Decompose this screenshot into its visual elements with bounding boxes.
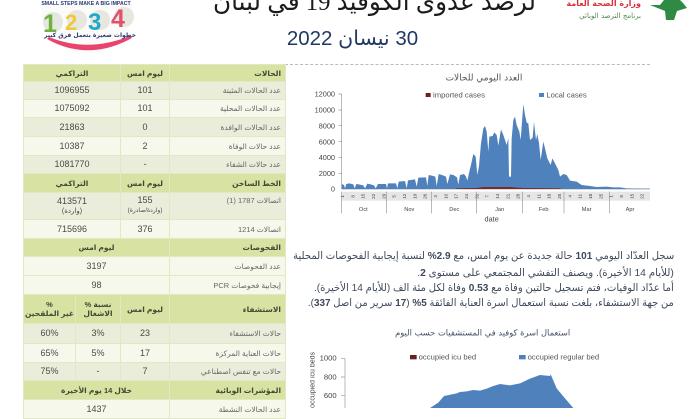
- axes: [338, 94, 650, 189]
- day tick labels: 17: [454, 193, 459, 199]
- icu row: حالات العناية المركزة: [215, 348, 281, 358]
- summary paragraph: [293, 250, 674, 309]
- indicators header row: [24, 381, 285, 399]
- legend: [410, 352, 599, 361]
- month labels: Jan: [495, 207, 504, 213]
- daily cases chart: [315, 74, 650, 224]
- hotline 1214 row: 376: [138, 224, 153, 234]
- imported cases row: عدد الحالات الوافدة: [220, 122, 281, 132]
- day tick labels: 26: [423, 193, 428, 199]
- recoveries row: عدد حالات الشفاء: [226, 160, 281, 169]
- icu row: 5%: [92, 348, 105, 358]
- logo: small steps campaign: 1: [43, 10, 57, 38]
- deaths row: [24, 137, 285, 155]
- logo: ministry of public health: برنامج الترصد الوبائي: [579, 12, 641, 20]
- month labels: Nov: [404, 207, 415, 213]
- icu row: 17: [140, 348, 150, 358]
- hospitalised row: 23: [140, 328, 150, 338]
- y axis labels: 6000: [319, 137, 335, 146]
- ventilator row: 75%: [40, 366, 58, 376]
- day tick labels: 3: [433, 195, 438, 198]
- hotline 1787 row: 155: [138, 195, 153, 205]
- confirmed cases row: 101: [138, 85, 153, 95]
- icu row: 65%: [40, 348, 58, 358]
- statistics table: [23, 64, 286, 419]
- day tick labels: 8: [350, 195, 355, 198]
- recoveries row: -: [144, 159, 147, 169]
- local cases row: 1075092: [54, 103, 90, 113]
- imported cases row: 21863: [59, 122, 85, 132]
- date: 30 نيسان 2022: [287, 27, 418, 50]
- hospitalised row: حالات الاستشفاء: [229, 329, 281, 338]
- chart title: العدد اليومي للحالات: [446, 74, 522, 84]
- confirmed cases row: [24, 82, 285, 99]
- day tick labels: 29: [381, 193, 386, 199]
- local cases row: عدد الحالات المحلية: [220, 104, 281, 113]
- month labels: Dec: [449, 207, 460, 213]
- test count row: [24, 257, 285, 275]
- deaths row: عدد حالات الوفاة: [229, 142, 281, 150]
- logo: small steps campaign: 2: [65, 10, 77, 35]
- month labels: Oct: [359, 207, 368, 213]
- confirmed cases row: 1096955: [54, 85, 90, 95]
- confirmed cases row: عدد الحالات المثبتة: [223, 86, 281, 95]
- y axis labels: [320, 354, 337, 400]
- y axis labels: 800: [324, 372, 337, 381]
- day tick labels: 5: [392, 195, 397, 198]
- hospital beds chart: [310, 327, 599, 408]
- day tick labels: 19: [412, 193, 417, 199]
- day tick labels: 11: [536, 194, 541, 199]
- hotline header row: الخط الساخن: [232, 178, 281, 188]
- logo: ministry of public health: [566, 0, 687, 20]
- day tick labels: 8: [619, 195, 624, 198]
- active cases row: عدد الحالات النشطة: [219, 404, 281, 414]
- logo: small steps campaign: SMALL STEPS MAKE A BIG IMPACT: [41, 1, 131, 7]
- month labels: Feb: [539, 207, 549, 213]
- hospital header row: % نسبة: [85, 300, 111, 309]
- day tick labels: 7: [485, 195, 490, 198]
- paragraph line 4: من جهة الاستشفاء، بلغت نسبة استعمال اسرة العناية الفائقة 5% (17 سرير من اصل 337).: [308, 297, 674, 309]
- hospital header row: غير الملقحين: [25, 309, 74, 318]
- day tick labels: 25: [557, 193, 562, 199]
- hospital header row: %: [46, 300, 53, 309]
- test positivity row: 98: [92, 280, 102, 290]
- deaths row: 2: [142, 140, 148, 150]
- month labels: Mar: [582, 207, 592, 213]
- recoveries row: [24, 156, 285, 173]
- cases header row: [24, 65, 285, 418]
- hotline header row: ليوم امس: [127, 178, 163, 188]
- day tick labels: 10: [443, 193, 448, 199]
- test positivity row: [24, 276, 285, 294]
- hotline header row: التراكمي: [56, 178, 88, 188]
- day tick labels: 4: [526, 195, 531, 198]
- y axis labels: 4000: [319, 153, 335, 162]
- cases header row: الحالات: [254, 68, 281, 78]
- ventilator row: حالات مع تنفس اصطناعي: [201, 367, 281, 376]
- day tick labels: 24: [464, 193, 469, 199]
- ventilator row: [24, 363, 285, 380]
- day tick labels: 22: [371, 193, 376, 199]
- y axis labels: [315, 90, 335, 194]
- day tick labels: 14: [495, 193, 500, 199]
- y axis labels: 0: [331, 185, 335, 194]
- logo: small steps campaign: خطوات صغيرة بتعمل فرق كبير: [43, 32, 136, 39]
- hospital header row: الاشغال: [83, 309, 113, 318]
- day tick labels: 12: [402, 193, 407, 199]
- legend: imported cases: [433, 90, 485, 99]
- hotline 1787 row: اتصالات 1787 (1): [227, 196, 281, 205]
- day tick labels: 15: [629, 193, 634, 199]
- occupied beds area: [430, 374, 573, 408]
- active cases row: [24, 400, 285, 418]
- deaths row: 10387: [59, 140, 85, 150]
- hotline 1787 row: 413571: [57, 196, 87, 206]
- day tick labels: [340, 193, 645, 199]
- ventilator row: -: [96, 366, 100, 376]
- y axis labels: 10000: [315, 105, 335, 114]
- logo: small steps campaign: 4: [111, 5, 125, 33]
- day tick labels: 1: [609, 195, 614, 198]
- hospital header row: الاستشفاء: [243, 304, 281, 314]
- logo: small steps campaign: [41, 1, 136, 50]
- date axis band: [342, 192, 650, 201]
- indicators header row: المؤشرات الوبائية: [216, 386, 281, 394]
- legend: [426, 90, 587, 99]
- ventilator row: 7: [142, 366, 148, 376]
- day tick labels: 15: [361, 193, 366, 199]
- day tick labels: 11: [578, 194, 583, 199]
- cases header row: ليوم امس: [127, 68, 163, 78]
- hotline 1214 row: اتصالات 1214: [238, 224, 281, 234]
- logo: small steps campaign: 3: [88, 9, 101, 36]
- local cases row: 101: [138, 103, 153, 113]
- hospitalised row: 60%: [40, 328, 58, 338]
- day tick labels: 18: [547, 193, 552, 199]
- hotline 1787 row: (واردة/صادرة): [128, 208, 162, 214]
- tests header row: الفحوصات: [243, 243, 281, 252]
- indicators header row: خلال 14 يوم الأخيرة: [61, 386, 132, 394]
- hospitalised row: 3%: [92, 328, 105, 338]
- y axis labels: 12000: [315, 90, 335, 99]
- legend: Local cases: [546, 90, 587, 99]
- day tick labels: 4: [567, 195, 572, 198]
- paragraph line 2: (للأيام 14 الأخيرة). ويصنف التفشي المجتمعي على مستوى 2.: [417, 267, 674, 279]
- test count row: عدد الفحوصات: [235, 262, 281, 270]
- local cases row: [24, 100, 285, 117]
- y axis labels: 600: [324, 391, 337, 400]
- axis: [341, 358, 345, 408]
- y axis labels: 8000: [319, 121, 335, 130]
- day tick labels: 1: [340, 195, 345, 198]
- day tick labels: 18: [588, 193, 593, 199]
- hotline header row: [24, 174, 285, 192]
- imported cases row: [24, 118, 285, 136]
- paragraph line 3: أما عدّاد الوفيات، فتم تسجيل حالتين وفاة مع 0.53 وفاة لكل مئة الف (للأيام 14 الأخيرة).: [314, 282, 674, 294]
- active cases row: 1437: [86, 404, 107, 414]
- icu row: [24, 344, 285, 362]
- day tick labels: 22: [640, 193, 645, 199]
- test positivity row: إيجابية فحوصات PCR: [213, 280, 281, 290]
- day tick labels: 28: [516, 193, 521, 199]
- day tick labels: 31: [474, 193, 479, 199]
- hotline 1214 row: 715696: [57, 224, 87, 234]
- tests header row: [24, 239, 285, 256]
- month separators: [342, 192, 609, 213]
- imported cases row: 0: [142, 122, 148, 132]
- day tick labels: 21: [505, 193, 510, 199]
- imported cases bars: [455, 187, 562, 189]
- y axis labels: 1000: [320, 354, 337, 363]
- hospital header row: ليوم امس: [127, 304, 163, 314]
- tests header row: ليوم امس: [79, 243, 114, 252]
- paragraph line 1: سجل العدّاد اليومي 101 حالة جديدة عن يوم امس، مع 2.9% لنسبة إيجابية الفحوصات المحلية: [293, 250, 674, 262]
- y axis labels: 2000: [319, 169, 335, 178]
- legend: occupied icu bed: [419, 352, 476, 361]
- recoveries row: 1081770: [54, 159, 90, 169]
- hotline 1787 row: (واردة): [62, 208, 82, 214]
- local cases bars: [342, 104, 650, 189]
- test count row: 3197: [86, 260, 107, 270]
- month labels: [359, 207, 635, 213]
- day tick labels: 25: [598, 193, 603, 199]
- hospitalised row: [24, 324, 285, 343]
- cases header row: التراكمي: [56, 68, 88, 78]
- dashed divider: [285, 64, 650, 65]
- hotline 1214 row: [24, 220, 285, 238]
- legend: occupied regular bed: [528, 352, 599, 361]
- x axis title: date: [485, 215, 499, 224]
- hotline 1787 row: [24, 193, 285, 219]
- chart title: استعمال اسرة كوفيد في المستشفيات حسب اليوم: [395, 327, 570, 337]
- hospital header row: [24, 295, 285, 323]
- month labels: Apr: [626, 207, 635, 213]
